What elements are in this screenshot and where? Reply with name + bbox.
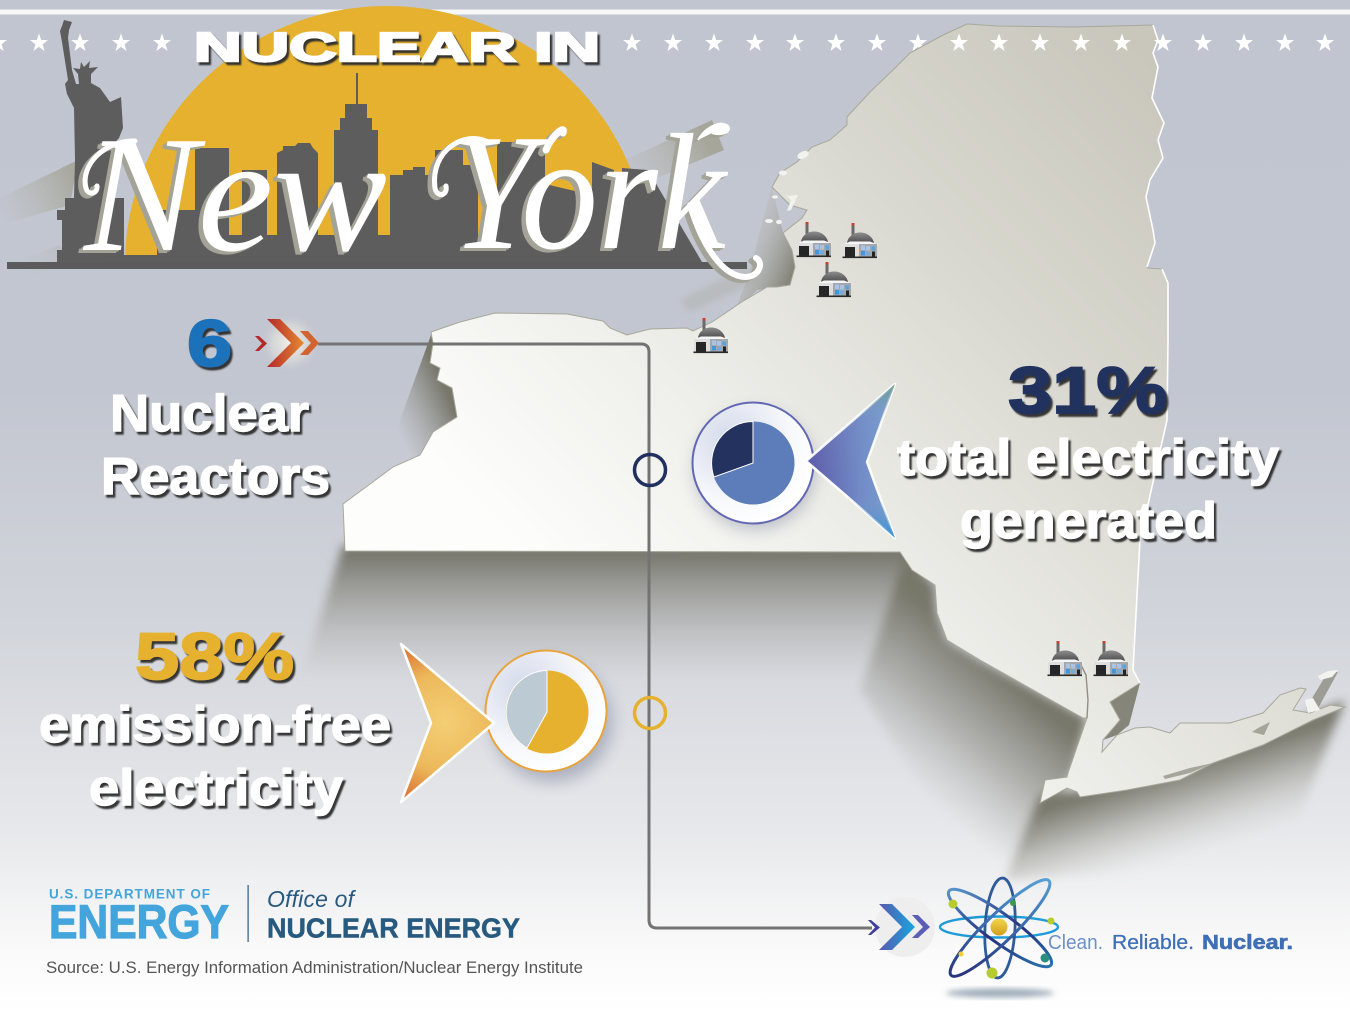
logo: Office of Nuclear Energy: Office of <box>267 886 357 912</box>
map: New York State <box>343 24 1345 803</box>
heading: New York: York <box>450 100 729 284</box>
source note: Source: U.S. Energy Information Administration/Nuclear Energy Institute <box>46 959 583 977</box>
islands <box>765 149 1338 713</box>
tagline <box>1048 932 1293 954</box>
stat: 6 nuclear reactors: Reactors <box>101 448 330 506</box>
stat: 58 percent emission-free electricity <box>39 619 391 816</box>
tagline: Reliable. <box>1112 932 1194 954</box>
map shadows <box>296 187 1345 880</box>
sun <box>125 6 649 262</box>
chevrons: blue <box>868 897 935 957</box>
arrow: blue <box>806 384 895 538</box>
stat: 6 nuclear reactors: Nuclear <box>110 385 309 443</box>
connector node: gold ring <box>634 698 666 728</box>
pie chart: 31 percent <box>692 402 815 530</box>
tagline: Nuclear. <box>1202 932 1293 954</box>
skyline silhouette with Statue of Liberty <box>7 20 747 269</box>
top rule <box>0 10 1350 14</box>
stat: 6 nuclear reactors <box>101 306 330 506</box>
pie chart: 58 percent <box>486 650 612 782</box>
logo: US Department of Energy: U.S. DEPARTMENT OF <box>49 886 210 902</box>
chevrons: red <box>255 313 320 373</box>
logo: Office of Nuclear Energy: NUCLEAR ENERGY <box>267 912 520 944</box>
stat: 58 percent emission-free electricity: electricity <box>89 759 344 816</box>
stat: 31 percent total electricity generated: generated <box>960 492 1217 549</box>
stat: 31 percent total electricity generated <box>897 353 1280 549</box>
stat: 6 nuclear reactors: 6 <box>187 306 232 380</box>
stat: 58 percent emission-free electricity: 58% <box>135 619 294 693</box>
stat: 58 percent emission-free electricity: emission-free <box>39 696 391 753</box>
logo: US Department of Energy: ENERGY <box>49 895 229 948</box>
logo: Office of Nuclear Energy <box>267 886 520 944</box>
stat: 31 percent total electricity generated: total electricity <box>897 429 1280 486</box>
atom logo <box>940 871 1059 998</box>
tagline: Clean. <box>1048 932 1103 954</box>
heading: New York <box>82 100 760 286</box>
connector line <box>318 344 872 928</box>
plant icons <box>692 222 1130 676</box>
arrow: orange <box>401 644 494 802</box>
logo divider <box>248 885 249 942</box>
stat: 31 percent total electricity generated: 31% <box>1008 353 1167 427</box>
star row <box>0 34 927 51</box>
heading: New York: New <box>82 102 387 286</box>
connector node: navy ring <box>634 454 666 486</box>
heading: Nuclear In: NUCLEAR IN <box>194 24 600 70</box>
stars over map <box>950 34 1334 51</box>
skyline long shadows <box>0 120 760 335</box>
